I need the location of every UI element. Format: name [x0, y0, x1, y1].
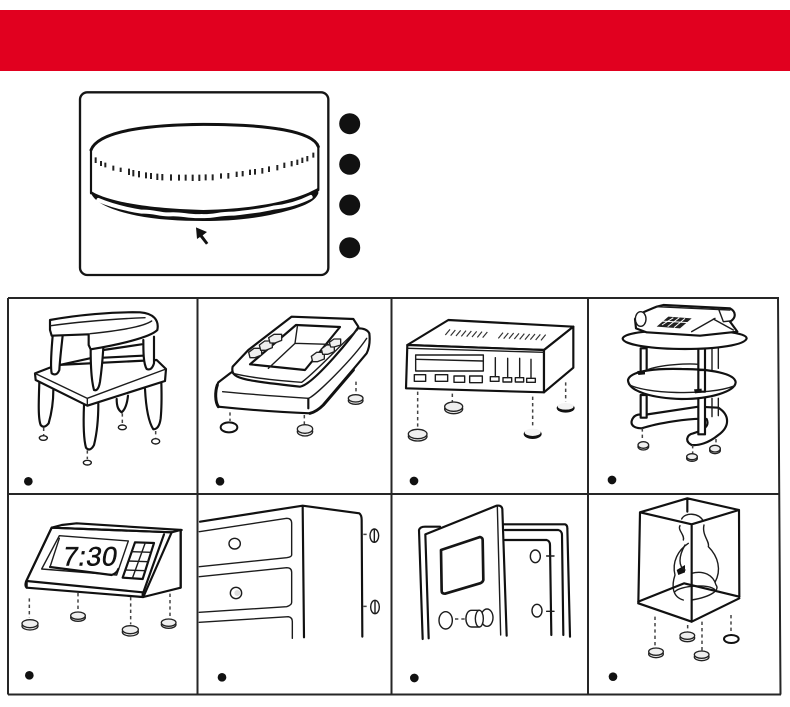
- stool top: [35, 360, 166, 406]
- panel: telephone on round table: [608, 305, 747, 484]
- bullet: [218, 673, 226, 682]
- felt pads: [363, 529, 379, 614]
- felt pads: [530, 550, 554, 617]
- door window: [441, 537, 483, 594]
- clock body: [25, 523, 182, 597]
- base: [216, 328, 370, 413]
- icon: round pad: [91, 124, 318, 221]
- bullet: [410, 477, 418, 485]
- glass case: [638, 498, 739, 622]
- keypad: [123, 542, 154, 579]
- top tier: [623, 330, 747, 349]
- middle shelf: [628, 369, 736, 399]
- drawers: [199, 518, 292, 638]
- felt pads: [39, 413, 160, 465]
- telephone: [635, 305, 737, 336]
- drawer knobs: [229, 538, 242, 599]
- legs: [641, 348, 718, 434]
- bullet: [24, 477, 33, 486]
- panel: chair on stool: [24, 312, 166, 486]
- lamp: [673, 514, 718, 600]
- felt pads: [638, 428, 720, 461]
- panel: felt pad product illustration: [80, 92, 328, 275]
- door: [419, 506, 507, 639]
- time readout: 7:30: [61, 542, 120, 572]
- grid of eight usage panels: [8, 298, 781, 694]
- icon: arrow pointing at pad: [196, 227, 208, 245]
- bullet: [216, 477, 224, 486]
- stool legs: [39, 382, 162, 449]
- buttons: [249, 334, 341, 362]
- felt pads: [221, 382, 363, 436]
- amplifier body: [406, 320, 573, 392]
- felt pads: [22, 593, 176, 636]
- panel: oil lamp in display case: [609, 498, 739, 681]
- felt pads: [408, 382, 575, 441]
- clock screen: [42, 536, 128, 575]
- panel: stereo amplifier: [406, 320, 575, 485]
- safe frame: [503, 524, 570, 637]
- bullet: [25, 671, 34, 680]
- panel: safe with open door: [410, 506, 570, 682]
- bottom ring: [632, 407, 727, 445]
- raised tray: [232, 317, 358, 387]
- bullet: [609, 672, 617, 681]
- panel: cabinet with drawers: [199, 506, 379, 682]
- vents: [445, 329, 546, 340]
- buttons and sliders: [414, 358, 535, 383]
- chair backrest: [50, 312, 158, 349]
- bullet list markers: [339, 113, 360, 258]
- red header band: [0, 10, 790, 71]
- cabinet outline: [200, 506, 362, 637]
- display: [416, 355, 483, 371]
- chair stretchers and legs: [51, 336, 154, 390]
- panel: digital alarm clock: [22, 523, 182, 680]
- bullet: [608, 476, 616, 484]
- door pad and knob: [439, 609, 493, 629]
- felt pads: [649, 615, 739, 661]
- bullet: [410, 674, 419, 682]
- panel: tray base: [216, 317, 370, 486]
- stitching marks: [96, 153, 313, 181]
